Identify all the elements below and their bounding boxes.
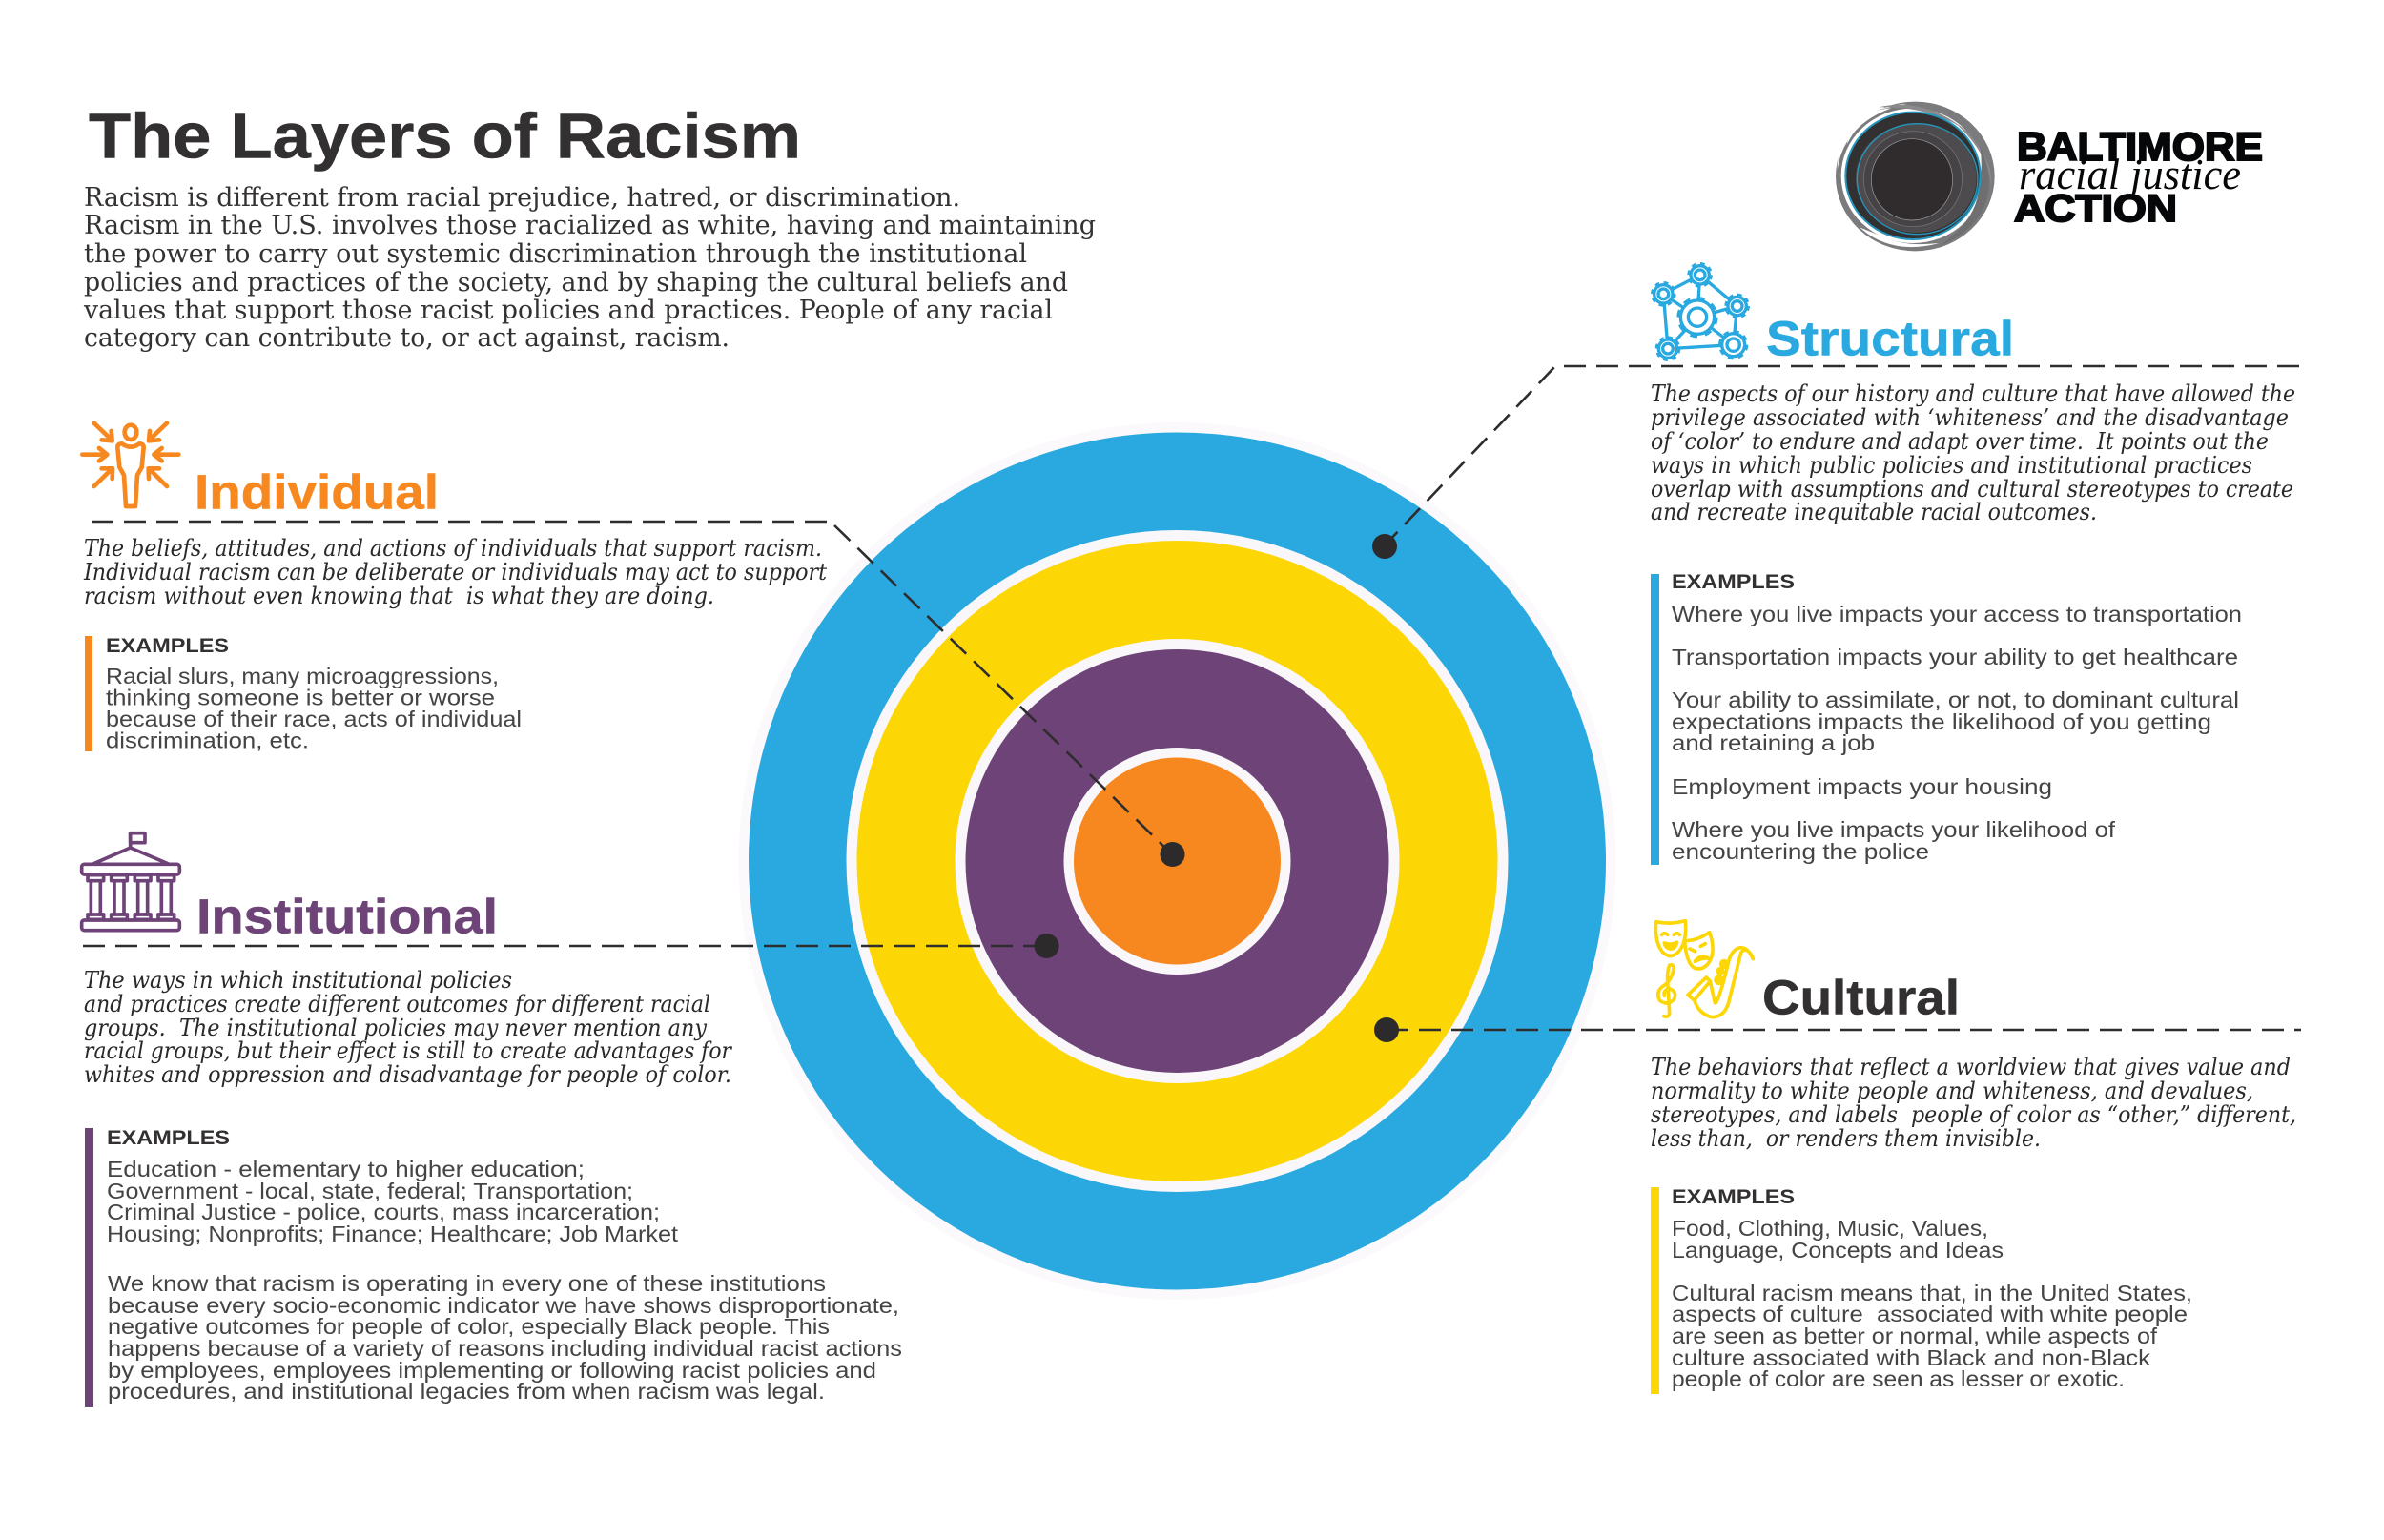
examples: cultural: Language, Concepts and Ideas [1672,1238,2004,1263]
icon: person with inward arrows [82,423,178,506]
examples: structural: Where you live impacts your likelihood of [1672,817,2116,842]
logo wordmark: ACTION [2014,188,2177,230]
description: institutional [84,967,732,1088]
description: cultural: less than, or renders them invisible. [1651,1125,2041,1152]
logo wordmark: BALTIMORE [2017,124,2263,169]
icon: government building with flag [82,833,179,931]
description: structural: and recreate inequitable racial outcomes. [1651,499,2097,525]
examples: individual: because of their race, acts of individual [106,707,522,731]
examples: structural: expectations impacts the likelihood of you getting [1672,709,2211,734]
examples: institutional: Criminal Justice - police, courts, mass incarceration; [107,1200,660,1224]
examples: cultural: Cultural racism means that, in the United States, [1672,1281,2192,1305]
examples: structural [1651,571,2242,865]
examples: institutional: Education - elementary to higher education; [107,1157,585,1181]
intro paragraph: category can contribute to, or act against, racism. [84,322,730,353]
examples: institutional [85,1127,902,1407]
examples: individual [85,635,522,753]
intro paragraph: policies and practices of the society, and by shaping the cultural beliefs and [84,267,1068,298]
description: cultural: normality to white people and whiteness, and devalues, [1651,1078,2253,1104]
examples: structural: and retaining a job [1672,730,1875,755]
ring: individual layer [1074,757,1281,965]
intro paragraph: values that support those racist policies and practices. People of any racial [83,295,1053,325]
intro paragraph: Racism in the U.S. involves those racialized as white, having and maintaining [84,210,1096,240]
examples: institutional: by employees, employees implementing or following racist policies and [108,1358,876,1383]
panel: structural [1372,264,2299,865]
examples: institutional: negative outcomes for people of color, especially Black people. This [108,1314,830,1339]
description: cultural: stereotypes, and labels people of color as “other,” different, [1651,1101,2296,1128]
ring: cultural layer [856,541,1497,1181]
icon: network of gears [1653,264,1748,359]
examples: institutional: happens because of a variety of reasons including individual racist actions [108,1336,902,1361]
description: individual [83,535,827,609]
description: individual: racism without even knowing that is what they are doing. [84,583,714,609]
title: The Layers of Racism [89,101,801,172]
concentric layers diagram [738,422,1615,1300]
examples: institutional: EXAMPLES [107,1127,230,1149]
examples: institutional: Government - local, state, federal; Transportation; [107,1179,633,1203]
examples: structural: Transportation impacts your ability to get healthcare [1672,645,2238,669]
logo wordmark [2014,124,2263,230]
examples: institutional: We know that racism is operating in every one of these institutions [108,1271,826,1296]
heading: Individual: Individual [195,465,439,519]
description: cultural: The behaviors that reflect a worldview that gives value and [1651,1054,2291,1080]
description: structural: overlap with assumptions and cultural stereotypes to create [1651,476,2293,503]
examples: cultural: people of color are seen as lesser or exotic. [1672,1366,2125,1391]
description: structural: The aspects of our history and culture that have allowed the [1651,380,2295,407]
examples: structural: EXAMPLES [1672,571,1795,593]
examples: structural: encountering the police [1672,839,1929,864]
examples: cultural: culture associated with Black and non-Black [1672,1345,2151,1370]
description: structural: privilege associated with ‘whiteness’ and the disadvantage [1651,404,2289,431]
heading: Institutional: Institutional [196,889,498,944]
logo: Baltimore Racial Justice Action [1836,102,2263,251]
examples: cultural [1651,1186,2192,1394]
icon: theater masks, treble clef and saxophone [1655,921,1753,1017]
connector line to institutional layer [83,934,1058,958]
intro paragraph: Racism is different from racial prejudice, hatred, or discrimination. [84,182,960,213]
panel: institutional [82,833,1059,1407]
connector line to individual layer [92,522,1184,867]
heading: Cultural: Cultural [1762,971,1960,1024]
description: structural: ways in which public policies and institutional practices [1651,452,2252,479]
logo swirl mark [1836,102,1995,251]
description: institutional: racial groups, but their effect is still to create advantages for [84,1037,732,1064]
examples: structural: Employment impacts your housing [1672,774,2052,799]
examples: structural: Where you live impacts your access to transportation [1672,602,2242,626]
examples: institutional: procedures, and institutional legacies from when racism was legal. [108,1379,825,1404]
connector line to cultural layer [1374,1017,2301,1042]
examples: cultural: aspects of culture associated with white people [1672,1302,2188,1326]
description: institutional: groups. The institutional policies may never mention any [84,1015,707,1041]
examples: individual: EXAMPLES [106,635,229,657]
examples: cultural: EXAMPLES [1672,1186,1795,1208]
description: structural [1651,380,2295,525]
ring: structural layer [749,433,1606,1289]
description: individual: Individual racism can be deliberate or individuals may act to support [83,559,827,585]
panel: cultural [1374,921,2301,1394]
panel: individual [82,423,1185,867]
examples: individual: Racial slurs, many microaggressions, [106,664,499,688]
description: institutional: The ways in which institutional policies [84,967,512,994]
description: structural: of ‘color’ to endure and adapt over time. It points out the [1651,428,2269,455]
description: individual: The beliefs, attitudes, and actions of individuals that support racism. [84,535,822,562]
examples: institutional: Housing; Nonprofits; Finance; Healthcare; Job Market [107,1222,679,1246]
examples: structural: Your ability to assimilate, or not, to dominant cultural [1672,688,2239,712]
heading: Structural: Structural [1766,311,2014,366]
description: institutional: and practices create different outcomes for different racial [84,991,710,1017]
description: cultural [1651,1054,2296,1152]
connector line to structural layer [1372,366,2299,559]
intro paragraph: the power to carry out systemic discrimination through the institutional [84,238,1027,269]
logo wordmark: racial justice [2019,150,2241,198]
examples: cultural: are seen as better or normal, while aspects of [1672,1324,2158,1348]
ring: institutional layer [965,649,1388,1073]
examples: institutional: because every socio-economic indicator we have shows disproportionate, [108,1293,899,1318]
examples: cultural: Food, Clothing, Music, Values, [1672,1216,1988,1241]
examples: individual: discrimination, etc. [106,729,309,753]
description: institutional: whites and oppression and disadvantage for people of color. [84,1061,731,1088]
examples: individual: thinking someone is better or worse [106,685,495,709]
intro paragraph [83,182,1096,353]
